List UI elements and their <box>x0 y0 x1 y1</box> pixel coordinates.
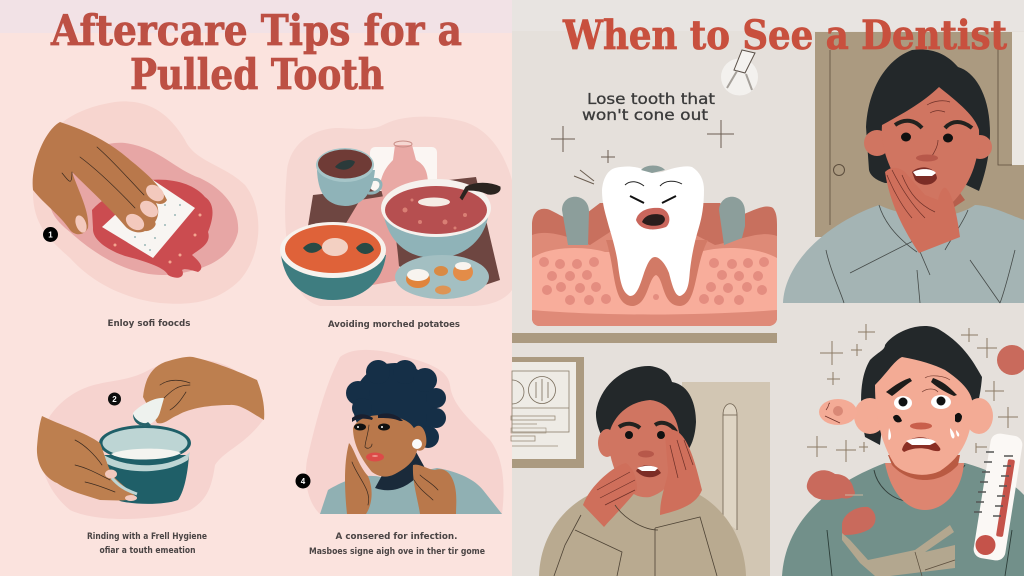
title: aftercare <box>50 6 462 99</box>
sparkles around person <box>807 324 1018 462</box>
badge 2 <box>108 392 121 406</box>
illustration: concerned person <box>306 350 504 514</box>
illustration: hand pressing gauze <box>33 101 258 304</box>
decorative sparkles near tooth <box>551 120 734 184</box>
illustration: tooth cross-section <box>532 166 777 326</box>
badge 2: 2 <box>112 395 117 404</box>
door background <box>815 32 1024 237</box>
beige wall panel <box>682 382 770 576</box>
panel: when to see a dentist <box>511 0 1024 576</box>
caption 4: A consered for infection. <box>336 532 458 542</box>
caption 3: Rinding with a Frell Hygiene <box>87 532 207 542</box>
hair <box>346 360 446 448</box>
feverish person <box>782 326 1024 576</box>
framed chart <box>511 357 584 468</box>
caption 1: Enloy sofi foocds <box>108 319 190 329</box>
person with cheek pain <box>783 50 1024 303</box>
caption 4 <box>309 532 485 557</box>
badge 1 <box>43 227 58 242</box>
text: loose tooth: Lose tooth that <box>587 90 715 108</box>
tooth face <box>625 181 682 229</box>
badge 4: 4 <box>301 477 306 486</box>
icon: dental tool <box>721 50 758 96</box>
illustration: rinsing cup <box>37 357 264 519</box>
illustration: soft foods <box>280 117 512 306</box>
person holding face <box>539 366 746 576</box>
caption 3 <box>87 532 207 556</box>
text: loose tooth <box>582 90 715 124</box>
badge 4 <box>296 474 310 488</box>
thermometer <box>972 432 1024 562</box>
bone dots <box>539 257 769 305</box>
panel: aftercare tips <box>0 0 512 576</box>
text: loose tooth: won't cone out <box>582 106 708 124</box>
shelf bar <box>512 333 777 343</box>
caption 4: Masboes signe aigh ove in ther tir gome <box>309 547 485 557</box>
title: aftercare: Pulled Tooth <box>130 50 384 99</box>
badge 1: 1 <box>48 230 53 240</box>
caption 3: ofiar a touth emeation <box>100 546 196 556</box>
title: aftercare: Aftercare Tips for a <box>50 6 462 55</box>
side teeth <box>562 197 745 245</box>
caption 2: Avoiding morched potatoes <box>328 320 460 330</box>
